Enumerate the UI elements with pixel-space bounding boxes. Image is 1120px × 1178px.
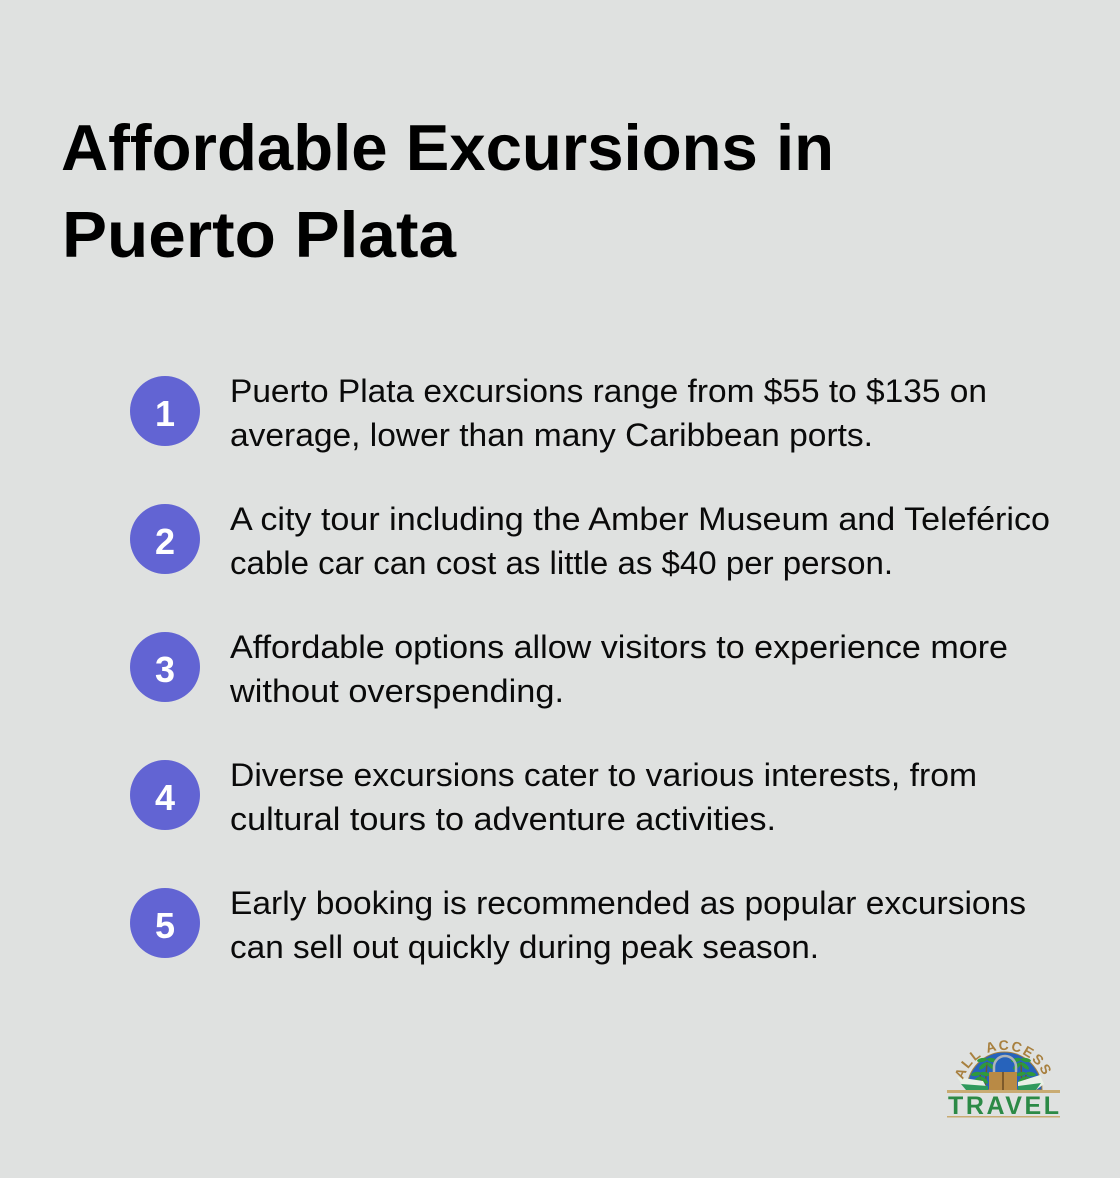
list item 1 xyxy=(130,373,987,453)
list item 5 xyxy=(130,885,1026,965)
number badge 3 xyxy=(130,632,200,702)
logo wordmark: TRAVEL xyxy=(948,1092,1059,1120)
item 1 text xyxy=(230,373,987,453)
list item 3 xyxy=(130,629,1008,709)
number badge 4 xyxy=(130,760,200,830)
item 4 text xyxy=(230,757,977,837)
item 1 text: average, lower than many Caribbean ports. xyxy=(230,417,873,453)
number badge 4: 4 xyxy=(155,777,175,818)
item 2 text: cable car can cost as little as $40 per person. xyxy=(230,545,893,581)
logo: All Access Travel xyxy=(947,1040,1060,1120)
logo: All Access Travel: ALL ACCESS xyxy=(956,1040,1051,1080)
item 5 text: can sell out quickly during peak season. xyxy=(230,929,819,965)
item 5 text: Early booking is recommended as popular excursions xyxy=(230,885,1026,921)
item 5 text xyxy=(230,885,1026,965)
number badge 1: 1 xyxy=(155,393,175,434)
item 3 text: without overspending. xyxy=(229,673,564,709)
logo padlock xyxy=(989,1056,1017,1090)
item 3 text xyxy=(229,629,1008,709)
number badge 3: 3 xyxy=(155,649,175,690)
number badge 2 xyxy=(130,504,200,574)
item 3 text: Affordable options allow visitors to experience more xyxy=(230,629,1008,665)
item 2 text xyxy=(230,501,1050,581)
item 1 text: Puerto Plata excursions range from $55 to $135 on xyxy=(230,373,987,409)
logo palm trees xyxy=(971,1057,1036,1090)
title: Puerto Plata xyxy=(62,198,457,271)
number badge 5: 5 xyxy=(155,905,175,946)
logo arched lettering xyxy=(963,1050,1045,1080)
list item 4 xyxy=(130,757,977,837)
logo bars xyxy=(947,1090,1060,1093)
number badge 5 xyxy=(130,888,200,958)
item 4 text: Diverse excursions cater to various interests, from xyxy=(230,757,977,793)
item 2 text: A city tour including the Amber Museum and Teleférico xyxy=(230,501,1050,537)
item 4 text: cultural tours to adventure activities. xyxy=(230,801,776,837)
number badge 1 xyxy=(130,376,200,446)
title xyxy=(61,111,834,271)
list item 2 xyxy=(130,501,1050,581)
number badge 2: 2 xyxy=(155,521,175,562)
logo boats xyxy=(957,1077,988,1090)
title: Affordable Excursions in xyxy=(61,111,834,184)
logo dome xyxy=(967,1052,1042,1090)
